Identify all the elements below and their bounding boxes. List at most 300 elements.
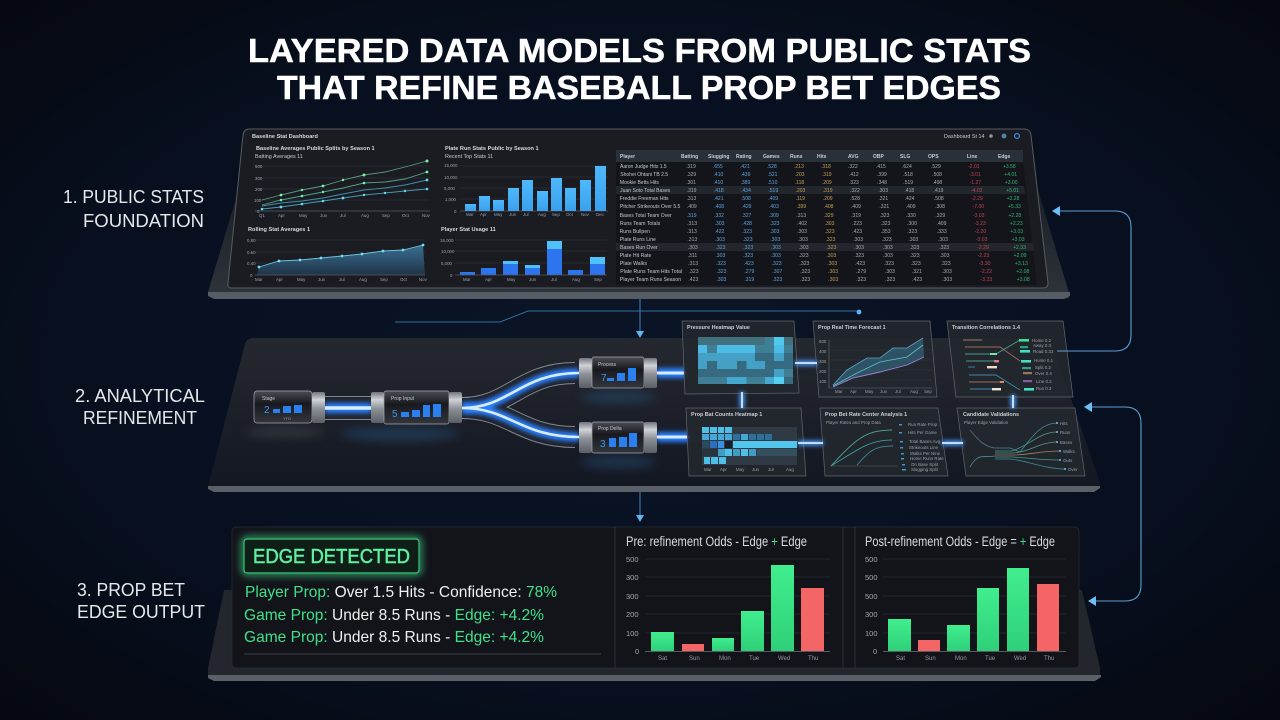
panel: analytical refinement xyxy=(208,321,1100,492)
panel: public stats foundation xyxy=(208,129,1070,299)
card: curves bottom: Hits Per Game xyxy=(908,430,937,435)
card: heatmap bottom: Jul xyxy=(768,467,774,472)
stats table: .323 xyxy=(743,245,753,251)
stats table: .303 xyxy=(827,261,837,267)
dashboard header: Dashboard St 14 xyxy=(944,134,984,140)
bar chart: post-refinement odds: Mon xyxy=(955,656,967,662)
stats table: .303 xyxy=(771,253,781,259)
stats table: +3.13 xyxy=(1015,261,1028,267)
stats table: .423 xyxy=(855,261,865,267)
bar chart: pre-refinement odds: Sun xyxy=(689,656,700,662)
bar chart: season volume: Recent Top Stats 11 xyxy=(445,154,493,160)
stats table: .415 xyxy=(876,164,886,170)
stats table: .409 xyxy=(768,196,778,202)
line chart: multi-series trends: Aug xyxy=(361,213,369,218)
stats table: .323 xyxy=(884,261,894,267)
stats table: .403 xyxy=(769,204,779,210)
bar chart: pre-refinement odds: 200 xyxy=(626,610,639,619)
card: line chart top: 300 xyxy=(819,359,827,364)
bar chart: post-refinement odds: Sun xyxy=(925,656,936,662)
card: line chart top: Sep xyxy=(924,389,932,394)
stacked bar chart: usage: 0 xyxy=(450,273,453,278)
stats table: +2.33 xyxy=(1013,245,1026,251)
label: public stats foundation xyxy=(63,187,204,231)
card: correlations top: Home 0.2 xyxy=(1032,338,1052,343)
stats table: +2.28 xyxy=(1008,213,1021,219)
stats table: .303 xyxy=(883,245,893,251)
stats table: Line xyxy=(967,154,977,160)
stats table: .322 xyxy=(850,188,860,194)
stats table: .203 xyxy=(795,172,805,178)
capsule: lower branch xyxy=(579,422,657,453)
stats table: Plate Walks xyxy=(620,261,647,267)
stats table: .508 xyxy=(934,196,944,202)
stats table: .303 xyxy=(770,237,780,243)
area chart: trend: Mar xyxy=(255,277,263,282)
stacked bar chart: usage xyxy=(440,227,607,282)
area chart: trend: 0.80 xyxy=(247,238,256,243)
stats table: .321 xyxy=(879,204,889,210)
stats table: .223 xyxy=(852,221,862,227)
dashboard header: Baseline Stat Dashboard xyxy=(252,134,318,140)
stats table: -1.27 xyxy=(970,180,981,186)
stats table: .389 xyxy=(740,180,750,186)
stats table: Edge xyxy=(998,154,1010,160)
capsule: upper branch: Process xyxy=(598,362,617,368)
label: analytical refinement: 2. ANALYTICAL xyxy=(75,386,205,406)
stats table: .319 xyxy=(851,213,861,219)
stats table: .303 xyxy=(797,229,807,235)
card: line chart top xyxy=(813,321,937,397)
card: line chart top: Jul xyxy=(895,389,901,394)
stats table: .303 xyxy=(828,277,838,283)
stats table: .421 xyxy=(740,164,750,170)
bar chart: season volume: Aug xyxy=(538,212,546,217)
stats table: +2.23 xyxy=(1010,221,1023,227)
text: prop findings xyxy=(244,584,557,646)
label: prop bet edge output xyxy=(77,580,205,622)
stats table: .348 xyxy=(877,180,887,186)
stats table: .213 xyxy=(794,164,804,170)
card: line chart top: 100 xyxy=(819,379,827,384)
area chart: trend: Sep xyxy=(380,277,388,282)
stats table: .303 xyxy=(825,221,835,227)
stats table: .323 xyxy=(770,221,780,227)
stats table: .313 xyxy=(687,229,697,235)
stats table: .419 xyxy=(934,188,944,194)
bar chart: post-refinement odds: Tue xyxy=(985,656,996,662)
card: curves bottom: Prop Bet Rate Center Analysis 1 xyxy=(825,412,907,418)
stats table: -2.23 xyxy=(978,253,989,259)
stacked bar chart: usage: Aug xyxy=(572,277,580,282)
arrow: refinement to output xyxy=(636,492,644,522)
capsule: stage 1: Stage xyxy=(262,396,275,402)
area chart: trend: Rolling Stat Averages 1 xyxy=(248,227,310,233)
card: line chart top: Prop Real Time Forecast 1 xyxy=(818,325,886,331)
stats table: .303 xyxy=(828,269,838,275)
line chart: multi-series trends: 500 xyxy=(255,164,263,169)
badge: edge detected: EDGE DETECTED xyxy=(253,546,410,568)
stats table: Mookie Betts Hits xyxy=(620,180,659,186)
stats table: OPS xyxy=(928,154,939,160)
stats table: .528 xyxy=(767,164,777,170)
bar chart: post-refinement odds: 100 xyxy=(865,629,878,638)
stats table: Hits xyxy=(817,154,827,160)
stats table: +5.33 xyxy=(1008,204,1021,210)
stats table: .323 xyxy=(716,261,726,267)
area chart: trend: May xyxy=(297,277,306,282)
stacked bar chart: usage: Player Stat Usage 11 xyxy=(441,227,496,233)
bar chart: season volume: May xyxy=(494,212,503,217)
card: heatmap bottom: Prop Bat Counts Heatmap 1 xyxy=(691,412,762,418)
stats table: .323 xyxy=(881,221,891,227)
stats table: .655 xyxy=(713,164,723,170)
card: heatmap bottom: Jun xyxy=(752,467,760,472)
line chart: multi-series trends: Jun xyxy=(320,213,328,218)
stats table: Player Team Runs Season xyxy=(620,277,681,283)
card: line chart top: May xyxy=(865,389,874,394)
stats table: .313 xyxy=(686,196,696,202)
stats table: .300 xyxy=(907,221,917,227)
connector dot xyxy=(857,310,861,314)
stats table: .498 xyxy=(932,180,942,186)
stats table: Bases Total Team Over xyxy=(620,213,672,219)
line chart: multi-series trends: Q1 xyxy=(259,213,265,218)
card: correlations top: Over 0.4 xyxy=(1035,371,1052,376)
stats table: .209 xyxy=(823,196,833,202)
stats table: .118 xyxy=(795,180,804,186)
stats table: .510 xyxy=(768,180,778,186)
stats table: .408 xyxy=(714,204,724,210)
stats table: .303 xyxy=(942,269,952,275)
stats table: .323 xyxy=(716,269,727,275)
stacked bar chart: usage: Jul xyxy=(551,277,557,282)
stats table: .303 xyxy=(883,253,893,259)
card: line chart top: Aug xyxy=(910,389,918,394)
bar chart: pre-refinement odds xyxy=(626,534,830,662)
stats table: .418 xyxy=(714,188,724,194)
card: heatmap top xyxy=(682,321,799,394)
stats table: .119 xyxy=(796,196,805,202)
line chart: multi-series trends: Baseline Averages Public Splits by Season 1 xyxy=(256,146,375,152)
stats table: .434 xyxy=(741,188,751,194)
stacked bar chart: usage: Apr xyxy=(485,277,492,282)
card: heatmap top: Pressure Heatmap Value xyxy=(687,325,750,331)
line chart: multi-series trends: Sep xyxy=(382,213,390,218)
bar chart: post-refinement odds: 0 xyxy=(873,647,877,656)
bar chart: season volume: 15,000 xyxy=(444,163,458,168)
card: network bottom: Runs xyxy=(1060,430,1071,435)
area chart: trend: 0 xyxy=(250,273,253,278)
label: analytical refinement xyxy=(75,386,205,428)
line chart: multi-series trends: 200 xyxy=(255,187,263,192)
card: line chart top: 500 xyxy=(819,339,827,344)
line chart: multi-series trends: 300 xyxy=(255,176,263,181)
stats table: +3.28 xyxy=(1007,196,1020,202)
stats table: .209 xyxy=(822,180,832,186)
stats table: .439 xyxy=(741,172,751,178)
stats table: .303 xyxy=(826,253,837,259)
stats table: .423 xyxy=(688,277,699,283)
stats table: +3.00 xyxy=(1005,180,1018,186)
card: heatmap bottom: Mar xyxy=(704,467,712,472)
bar chart: post-refinement odds: 500 xyxy=(865,592,878,601)
stats table: .319 xyxy=(823,188,833,194)
stats table: .323 xyxy=(825,237,836,243)
stats table: .418 xyxy=(904,188,914,194)
stats table: .303 xyxy=(771,245,781,251)
stats table: .323 xyxy=(743,237,753,243)
stats table: -3.01 xyxy=(969,172,981,178)
card: network bottom: Over xyxy=(1068,467,1078,472)
bar chart: post-refinement odds: 500 xyxy=(865,555,878,564)
bar chart: season volume: Apr xyxy=(480,212,487,217)
card: line chart top: 200 xyxy=(819,369,827,374)
card: heatmap bottom xyxy=(686,408,806,476)
stats table: .519 xyxy=(903,180,913,186)
bar chart: post-refinement odds xyxy=(865,534,1066,662)
stats table: .323 xyxy=(854,253,864,259)
stats table: .410 xyxy=(713,180,723,186)
stats table: .323 xyxy=(882,237,892,243)
arrow: foundation to refinement xyxy=(636,299,644,338)
stats table: .409 xyxy=(687,204,697,210)
stats table: .307 xyxy=(772,269,783,275)
stats table: .323 xyxy=(689,269,699,275)
card: network bottom: Player Edge Validation xyxy=(964,420,1009,425)
stats table: .303 xyxy=(715,253,726,259)
card: correlations top: Line 0.2 xyxy=(1036,379,1052,384)
stacked bar chart: usage: Mar xyxy=(463,277,471,282)
stats table: Bases Run Over xyxy=(620,245,658,251)
stats table: .332 xyxy=(714,213,724,219)
stats table: +3.08 xyxy=(1017,277,1030,283)
card: correlations top: Home 0.1 xyxy=(1034,358,1054,363)
stats table: .323 xyxy=(772,261,782,267)
label: public stats foundation: FOUNDATION xyxy=(83,211,204,231)
stats table: .508 xyxy=(741,196,751,202)
stats table: +4.01 xyxy=(1004,172,1017,178)
capsule: stage 1 xyxy=(254,391,325,423)
stats table: .529 xyxy=(931,164,941,170)
stats table: .319 xyxy=(687,213,697,219)
bar chart: pre-refinement odds: Thu xyxy=(808,656,818,662)
stats table: .329 xyxy=(824,213,834,219)
stats table: .409 xyxy=(906,204,916,210)
stats table: .323 xyxy=(941,261,951,267)
dashboard header xyxy=(252,134,1019,140)
bar chart: pre-refinement odds: 300 xyxy=(626,573,639,582)
stats table: .333 xyxy=(937,229,947,235)
stats table: .323 xyxy=(742,229,752,235)
card: correlations top: Away 0.3 xyxy=(1033,343,1052,348)
card: correlations top: Run 0.3 xyxy=(1036,386,1052,391)
stats table: .303 xyxy=(688,245,698,251)
stats table: .323 xyxy=(743,253,753,259)
stats table: .323 xyxy=(880,213,890,219)
area chart: trend: Jul xyxy=(339,277,345,282)
stacked bar chart: usage: 5,000 xyxy=(441,261,453,266)
stats table: .303 xyxy=(938,237,948,243)
card: correlations top: Road 0.33 xyxy=(1033,349,1054,354)
bar chart: season volume: Plate Run Stats Public by Season 1 xyxy=(445,146,539,152)
bar chart: post-refinement odds: 300 xyxy=(865,610,878,619)
label: public stats foundation: 1. PUBLIC STATS xyxy=(63,187,204,207)
stats table: Aaron Judge Hits 1.5 xyxy=(620,164,667,170)
card: network bottom: Walks xyxy=(1063,449,1076,454)
area chart: trend: 0.60 xyxy=(247,250,256,255)
stats table: Games xyxy=(763,154,780,160)
stats table: .319 xyxy=(822,172,832,178)
stats table: .322 xyxy=(848,164,858,170)
stats table: -2.22 xyxy=(980,269,992,275)
stats table: -2.20 xyxy=(975,229,986,235)
bar chart: season volume: Dec xyxy=(596,212,605,217)
stats table: .624 xyxy=(902,164,912,170)
stats table: .313 xyxy=(796,213,806,219)
card: line chart top: 400 xyxy=(819,349,827,354)
capsule: stage 2 xyxy=(371,391,462,424)
stats table: .301 xyxy=(686,180,696,186)
bar chart: post-refinement odds: Sat xyxy=(896,656,905,662)
bar chart: season volume: 0 xyxy=(454,209,457,214)
text: prop findings: Player Prop: Over 1.5 Hits - Confidence: 78% xyxy=(245,584,557,601)
stats table: -3.23 xyxy=(974,221,986,227)
capsule: lower branch: Prop Delta xyxy=(598,426,622,432)
card: heatmap bottom: Apr xyxy=(720,467,727,472)
capsule: stage 2: 5 xyxy=(392,409,398,420)
badge: edge detected xyxy=(244,539,419,573)
stats table: .279 xyxy=(856,269,866,275)
stats table: .521 xyxy=(768,172,778,178)
area chart: trend: Aug xyxy=(359,277,367,282)
stats table: .519 xyxy=(768,188,778,194)
card: line chart top: Jun xyxy=(880,389,888,394)
label: prop bet edge output: EDGE OUTPUT xyxy=(77,602,205,622)
bar chart: season volume: Nov xyxy=(581,212,590,217)
stats table: .303 xyxy=(854,245,864,251)
stats table: .323 xyxy=(825,229,835,235)
stats table: Runs Team Totals xyxy=(620,221,661,227)
bar chart: pre-refinement odds: Mon xyxy=(719,656,731,662)
stats table: .323 xyxy=(772,277,782,283)
stats table: Runs Bullpen xyxy=(620,229,650,235)
stats table: .323 xyxy=(856,277,866,283)
bar chart: post-refinement odds: Thu xyxy=(1044,656,1054,662)
panel: prop bet edge output xyxy=(208,527,1101,681)
text: prop findings: Game Prop: Under 8.5 Runs - Edge: +4.2% xyxy=(244,607,544,624)
card: network bottom: Bases xyxy=(1060,440,1073,445)
bar chart: pre-refinement odds: 0 xyxy=(635,647,639,656)
stats table: .313 xyxy=(688,261,698,267)
stats table: .508 xyxy=(932,172,942,178)
bar chart: pre-refinement odds: Pre: refinement Odds - Edge + Edge xyxy=(626,534,807,549)
stats table: .399 xyxy=(796,204,806,210)
stats table: Juan Soto Total Bases xyxy=(620,188,671,194)
stats table: .408 xyxy=(824,204,834,210)
card: curves bottom: Total Bases Avg xyxy=(909,439,941,444)
stats table: .422 xyxy=(714,229,725,235)
capsule: upper branch: 7 xyxy=(601,373,607,384)
stats table: .319 xyxy=(687,188,697,194)
title xyxy=(248,32,1031,106)
stats table: .423 xyxy=(912,277,922,283)
stats table: .424 xyxy=(905,196,915,202)
card: curves bottom: Walks Per Nine xyxy=(910,451,941,456)
bar chart: pre-refinement odds: Sat xyxy=(658,656,667,662)
stats table: .303 xyxy=(853,237,863,243)
stats table: .323 xyxy=(939,245,949,251)
area chart: trend: Oct xyxy=(400,277,408,282)
stats table: .308 xyxy=(935,204,945,210)
stats table: Plate Runs Line xyxy=(620,237,656,243)
bar chart: pre-refinement odds: 100 xyxy=(626,629,639,638)
stats table: .319 xyxy=(744,277,754,283)
stats table: SLG xyxy=(900,154,910,160)
stacked bar chart: usage: Sep xyxy=(594,277,602,282)
stats table: AVG xyxy=(848,154,859,160)
capsule: lower branch: 3 xyxy=(600,439,606,450)
stats table: Shohei Ohtani TB 2.5 xyxy=(620,172,668,178)
title: THAT REFINE BASEBALL PROP BET EDGES xyxy=(277,69,1001,106)
capsule: stage 2: Prop Input xyxy=(391,396,415,402)
title: LAYERED DATA MODELS FROM PUBLIC STATS xyxy=(248,32,1031,69)
stats table: .528 xyxy=(850,196,860,202)
stats table: .412 xyxy=(849,172,859,178)
stats table: .323 xyxy=(911,261,921,267)
stats table: .313 xyxy=(687,237,698,243)
line chart: multi-series trends: Apr xyxy=(278,213,285,218)
capsule: stage 1: YTD xyxy=(283,416,291,421)
card: correlations top: Split 0.2 xyxy=(1035,365,1051,370)
stats table: .409 xyxy=(937,221,947,227)
stats table: Plate Hit Rate xyxy=(620,253,652,259)
bar chart: season volume: 1,000 xyxy=(445,197,457,202)
stats table: -4.02 xyxy=(971,188,983,194)
stats table: .423 xyxy=(744,261,754,267)
stats table: .303 xyxy=(770,229,780,235)
bar chart: season volume xyxy=(444,146,608,217)
bar chart: post-refinement odds: Wed xyxy=(1014,656,1026,662)
stats table: +5.01 xyxy=(1006,188,1019,194)
stats table: Pitcher Strikeouts Over 5.5 xyxy=(620,204,681,210)
stats table: -3.03 xyxy=(976,237,988,243)
label: prop bet edge output: 3. PROP BET xyxy=(77,580,185,600)
stats table: -3.30 xyxy=(979,261,991,267)
stats table: Rating xyxy=(736,154,752,160)
card: correlations top: Transition Correlations 1.4 xyxy=(952,325,1020,331)
stacked bar chart: usage: 15,000 xyxy=(440,238,454,243)
bar chart: season volume: Jun xyxy=(509,212,517,217)
stats table: Plate Runs Team Hits Total xyxy=(620,269,682,275)
bar chart: season volume: 5,000 xyxy=(444,186,456,191)
stats table: .410 xyxy=(714,172,724,178)
shadows under capsules xyxy=(245,391,656,468)
stats table: .428 xyxy=(742,221,752,227)
stats table: Batting xyxy=(681,154,698,160)
arrow: output feedback loop xyxy=(1084,402,1141,606)
stacked bar chart: usage: Jun xyxy=(529,277,537,282)
stats table: Player xyxy=(620,154,635,160)
card: curves bottom xyxy=(820,408,948,476)
stats table: +3.58 xyxy=(1003,164,1016,170)
stats table: .323 xyxy=(799,253,809,259)
card: heatmap bottom: Aug xyxy=(786,467,794,472)
area chart: trend xyxy=(247,227,428,282)
stats table: -2.29 xyxy=(971,196,983,202)
stats table: .323 xyxy=(826,245,836,251)
stats table: .327 xyxy=(741,213,752,219)
